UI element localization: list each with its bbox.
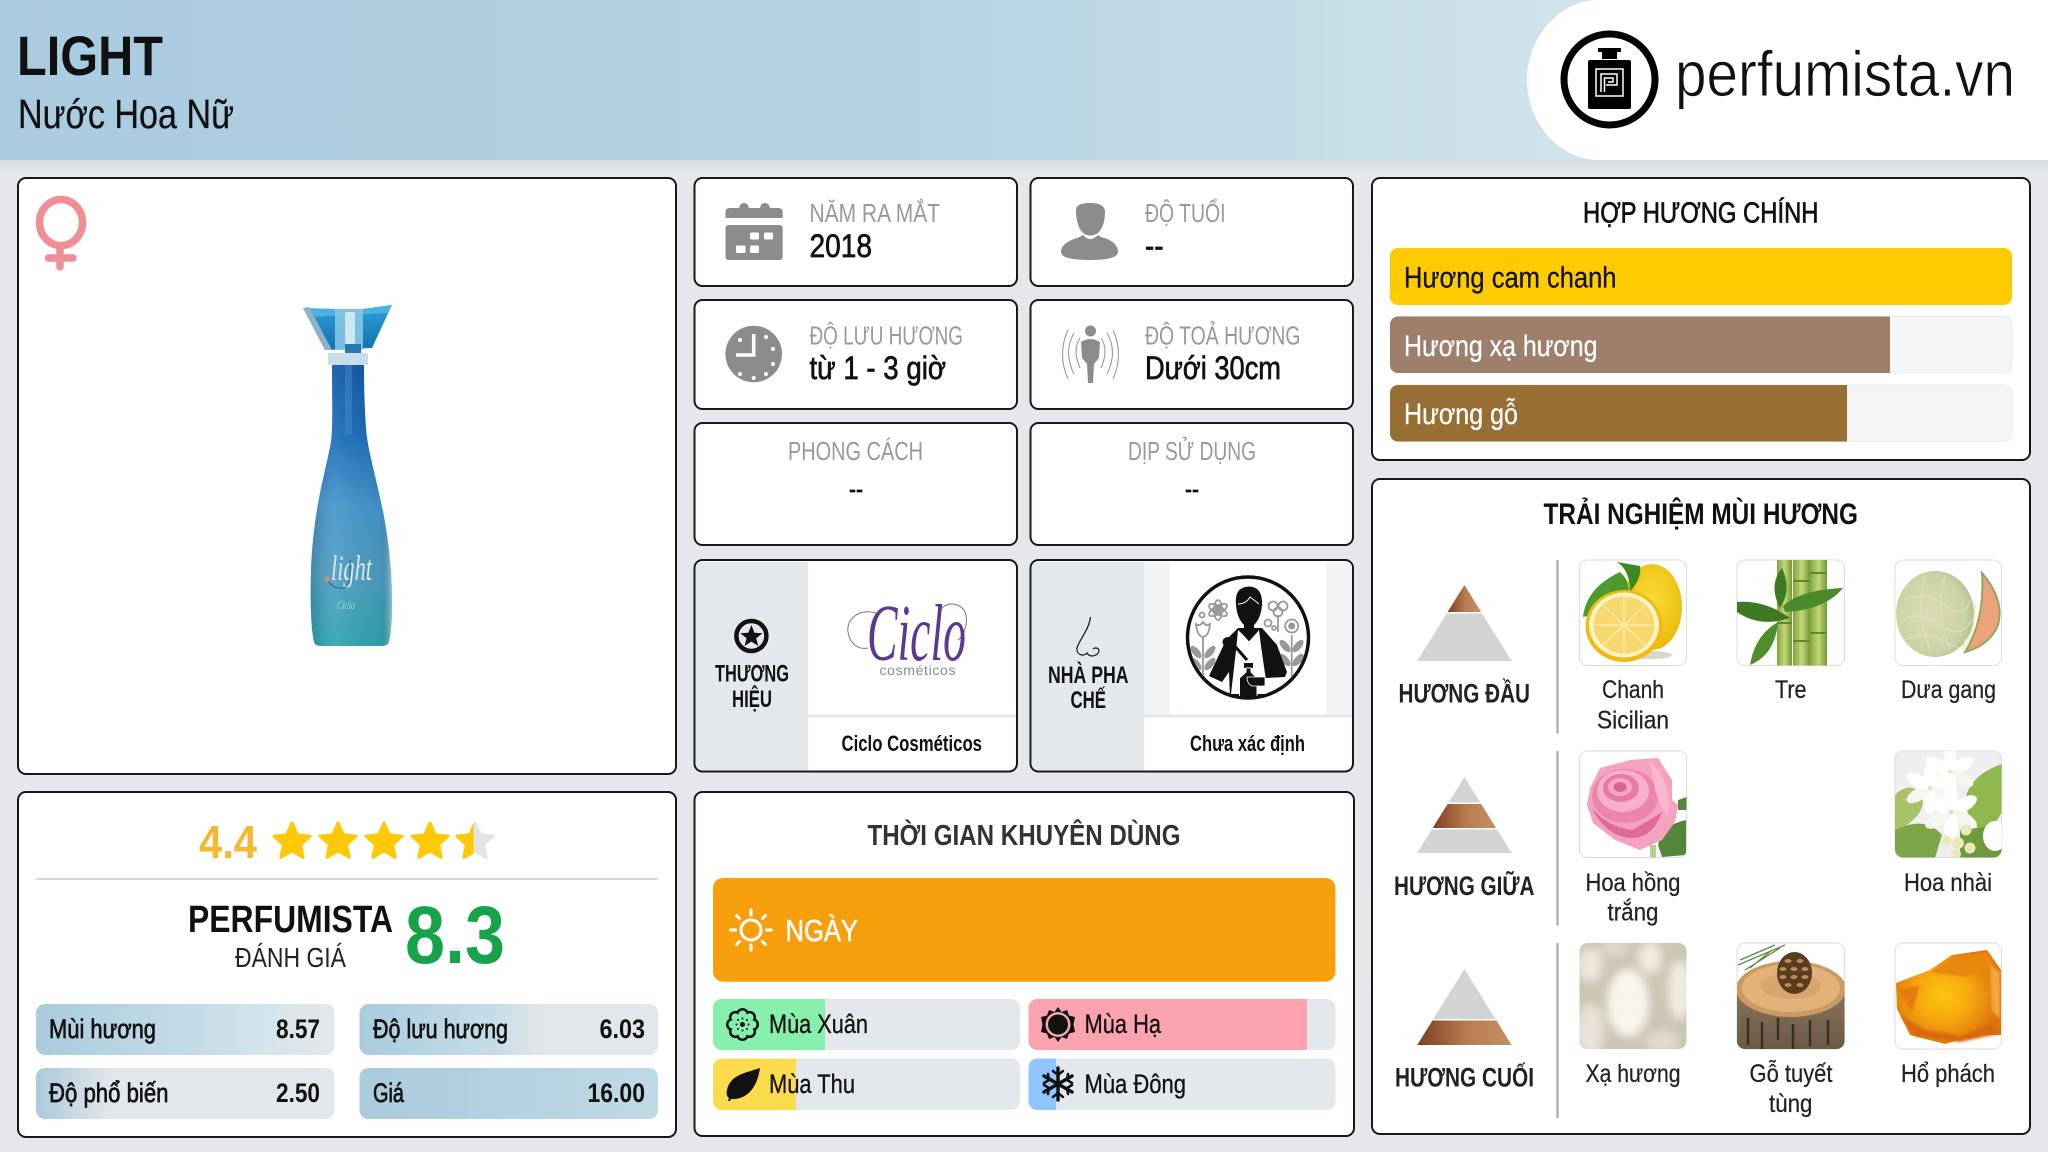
icon: perfumer portrait [1188, 577, 1308, 698]
essence bottle [1240, 663, 1265, 697]
heading: HỢP HƯƠNG CHÍNH [1583, 196, 1818, 230]
raised hand and dropper [1236, 646, 1248, 661]
panel: recommended time [694, 792, 1354, 1136]
card: perfumer: CHẾ [1070, 686, 1106, 714]
metric: popularity: 2.50 [276, 1078, 320, 1108]
season: autumn [713, 1058, 1020, 1110]
note: jasmine [1895, 745, 2007, 859]
icon: calendar [726, 203, 783, 260]
overall score: 8.3 [405, 890, 505, 981]
note label: tùng [1769, 1090, 1812, 1118]
icon: nose [1077, 617, 1099, 656]
apron [1231, 630, 1268, 694]
botanical decoration [1188, 600, 1306, 680]
note label: Sicilian [1597, 706, 1669, 734]
heading: THỜI GIAN KHUYÊN DÙNG [868, 818, 1180, 852]
card: style [694, 423, 1017, 545]
note: cedar wood [1736, 943, 1846, 1050]
note label: Hổ phách [1901, 1060, 1995, 1088]
label: PHONG CÁCH [788, 436, 923, 466]
accord: musk: Hương xạ hương [1404, 330, 1598, 363]
metric: price: 16.00 [588, 1078, 645, 1108]
label: heart notes: HƯƠNG GIỮA [1394, 870, 1534, 901]
label: base notes: HƯƠNG CUỐI [1395, 1060, 1534, 1092]
label: top notes: HƯƠNG ĐẦU [1398, 678, 1530, 708]
metric: popularity: Độ phổ biến [49, 1078, 168, 1108]
panel: scent experience [1372, 479, 2030, 1134]
heading: TRẢI NGHIỆM MÙI HƯƠNG [1544, 497, 1858, 531]
bottle script label [324, 548, 373, 612]
label: ĐỘ TOẢ HƯƠNG [1145, 320, 1300, 350]
season label: Mùa Đông [1084, 1069, 1186, 1099]
note label: Tre [1775, 676, 1806, 704]
score caption: ĐÁNH GIÁ [235, 942, 346, 973]
season label: Mùa Hạ [1084, 1009, 1162, 1039]
value: -- [1185, 474, 1199, 504]
accord: citrus [1390, 248, 2012, 305]
bottle script label: Ciclo [337, 598, 355, 612]
value: -- [1145, 228, 1164, 264]
card: longevity [694, 300, 1017, 409]
season label: Mùa Thu [769, 1069, 855, 1099]
side label: NHÀ PHA [1048, 661, 1128, 689]
day bar [713, 878, 1335, 982]
note label: Hoa nhài [1904, 869, 1992, 897]
bottle script label: light [331, 548, 373, 588]
bottle cap [303, 305, 392, 365]
metric: scent: Mùi hương [49, 1014, 156, 1044]
note: rose [1580, 751, 1687, 858]
icon: perfume logo [1564, 34, 1655, 125]
icon: sun badge [1041, 1007, 1075, 1042]
card: age [1030, 178, 1353, 286]
metric: longevity: Độ lưu hương [373, 1014, 508, 1044]
note label [1750, 1059, 1833, 1118]
value: Dưới 30cm [1145, 350, 1281, 386]
perfume bottle [303, 305, 392, 646]
icon: snowflake [1044, 1068, 1072, 1100]
metric: longevity [360, 1004, 658, 1055]
label: ĐỘ LƯU HƯƠNG [810, 320, 963, 350]
icon: body radius [1062, 326, 1118, 383]
brand logo [848, 590, 966, 678]
panel: main accords [1372, 178, 2030, 460]
head [1236, 586, 1262, 632]
note label: Hoa hồng [1586, 869, 1680, 897]
brand logo: Ciclo [867, 590, 966, 678]
accord: woody [1390, 385, 2012, 442]
card: perfumer [1030, 560, 1353, 772]
icon: pyramid top notes [1417, 585, 1512, 661]
subtitle: Nước Hoa Nữ [18, 91, 234, 137]
header band [0, 0, 2048, 172]
accord: woody: Hương gỗ [1404, 398, 1518, 431]
user rating value: 4.4 [199, 816, 257, 868]
logo panel [1527, 0, 2048, 160]
card: brand: HIỆU [732, 685, 772, 713]
metric: price: Giá [373, 1078, 405, 1108]
card: occasion [1030, 423, 1353, 545]
note label [1597, 676, 1669, 734]
season label: Mùa Xuân [769, 1009, 868, 1039]
icon: flower [726, 1008, 759, 1041]
note label: Dưa gang [1901, 676, 1996, 704]
icon: sun [730, 910, 772, 950]
note: musk [1580, 943, 1686, 1049]
label: DỊP SỬ DỤNG [1128, 435, 1256, 466]
icon: leaf [727, 1068, 760, 1101]
note: amber [1895, 943, 2002, 1049]
metric: scent: 8.57 [276, 1014, 320, 1044]
note: bamboo [1737, 560, 1844, 666]
season: winter [1028, 1058, 1336, 1110]
season: spring [713, 999, 1020, 1050]
brand logo: cosméticos [880, 662, 956, 678]
metric: longevity: 6.03 [600, 1014, 645, 1044]
value: từ 1 - 3 giờ [810, 350, 946, 386]
card: release year [694, 178, 1017, 286]
panel: product image [18, 178, 676, 774]
icon: pyramid base notes [1417, 969, 1512, 1045]
value: 2018 [810, 228, 872, 264]
value: -- [849, 474, 863, 504]
note label: Gỗ tuyết [1750, 1059, 1833, 1088]
icon: clock [725, 326, 782, 382]
label: NĂM RA MẮT [810, 198, 940, 228]
metric: scent [36, 1004, 334, 1055]
icon: star badge [736, 621, 766, 651]
accord: musk [1390, 316, 2012, 373]
accord: citrus: Hương cam chanh [1404, 262, 1616, 294]
title: LIGHT [17, 24, 163, 87]
note: lemon [1580, 560, 1686, 666]
note: melon [1895, 560, 2002, 666]
panel: rating [18, 792, 676, 1137]
card: brand [694, 560, 1017, 772]
torso [1209, 628, 1287, 698]
day label: NGÀY [786, 913, 858, 948]
note label: Chanh [1602, 676, 1664, 704]
icon: person [1061, 203, 1118, 260]
note label: trắng [1608, 898, 1658, 926]
note label: Xạ hương [1586, 1060, 1680, 1088]
metric: price [360, 1068, 658, 1119]
season: summer [1028, 999, 1336, 1050]
metric: popularity [36, 1068, 334, 1119]
icon: pyramid heart notes [1417, 777, 1512, 853]
note label [1586, 869, 1680, 926]
icon: female symbol [40, 200, 82, 267]
side label: THƯƠNG [715, 660, 789, 688]
label: ĐỘ TUỔI [1145, 198, 1226, 228]
perfumer name: Chưa xác định [1190, 731, 1305, 756]
logo wordmark: perfumista.vn [1675, 38, 2015, 110]
card: projection [1030, 300, 1353, 409]
star rating [274, 823, 493, 857]
brand name: Ciclo Cosméticos [842, 731, 982, 756]
brand score label: PERFUMISTA [188, 899, 393, 941]
